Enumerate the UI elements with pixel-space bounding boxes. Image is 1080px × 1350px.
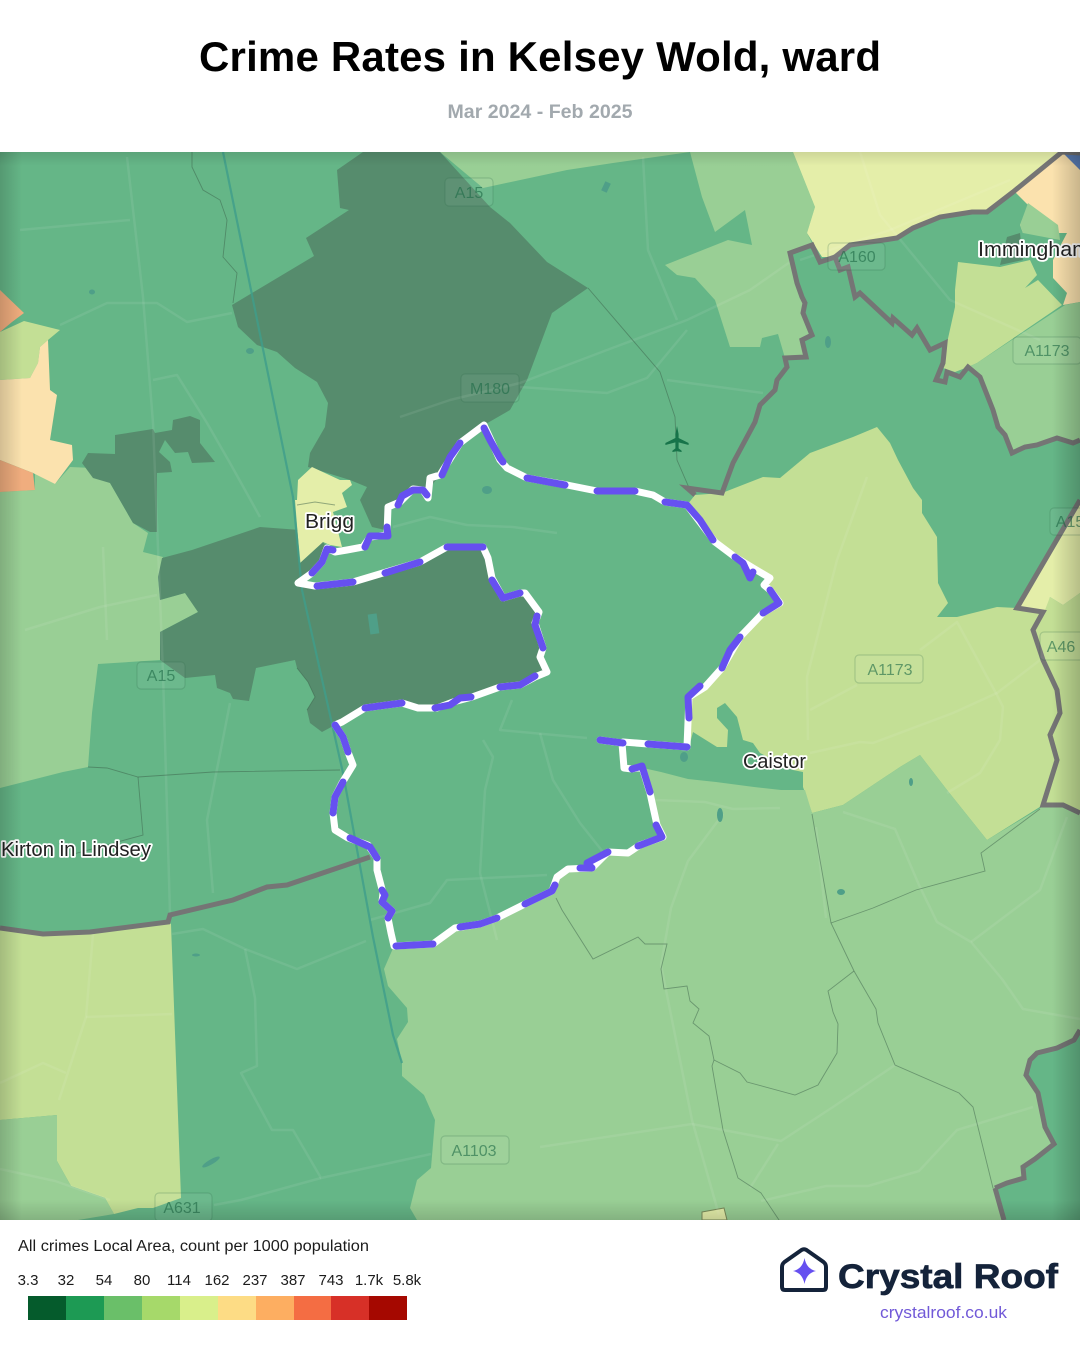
place labels: Kirton in Lindsey [1,839,151,861]
legend scale values: 80 [134,1272,150,1289]
place labels: Caistor [743,751,806,773]
website link: crystalroof.co.uk [880,1303,1008,1322]
road shields: A1173 [1024,343,1070,360]
area: west orange south [0,460,35,492]
road shields: A46 [1047,639,1075,656]
legend scale values: 237 [242,1272,268,1289]
area: yellow-green Immingham south [943,260,1062,372]
title: Crime Rates in Kelsey Wold, ward [199,33,881,80]
map edge vignette [0,152,1080,1220]
road shields: A631 [163,1200,201,1217]
area: Brigg pale [295,467,352,563]
road shields [137,178,1080,1221]
place labels [1,239,1080,861]
area: small yellow south town [702,1208,727,1220]
road shields: A15 [455,185,483,202]
area: far east yellow-green strip [1033,593,1080,813]
road shields: A15 [147,668,175,685]
ward boundary: purple dashes [312,428,779,946]
area: dark west fragment [82,416,215,532]
legend scale values: 32 [58,1272,74,1289]
area: west orange north [0,290,24,332]
logo: Crystal Roof [782,1249,1059,1322]
roads [0,152,1080,1215]
place labels: Brigg [305,511,354,533]
railway line [223,152,402,1063]
legend scale values: 3.3 [18,1272,38,1289]
legend colour bar [28,1296,407,1320]
area: central-east yellow-green [687,427,1060,840]
road shields: A1103 [451,1143,497,1160]
wordmark: Crystal Roof [838,1258,1059,1296]
area: Immingham light green [1020,203,1060,240]
legend scale values: 5.8k [393,1272,422,1289]
legend scale values: 114 [167,1272,191,1289]
choropleth map [0,152,1080,1223]
area: southern light green [384,755,1080,1220]
area: A1173 light green east [968,302,1080,453]
legend scale values [18,1272,422,1289]
area: west light green [0,467,198,788]
road shields: A160 [838,249,876,266]
area: north-east light green [665,152,815,358]
area: west peach [0,340,73,484]
area: far east pale [1021,505,1080,610]
area: south-west yellow-green [0,922,181,1214]
thin boundaries [70,152,1040,1223]
ward boundary: white base line [298,425,780,946]
area: estuary water [1064,154,1080,170]
area: west yellow-green [0,321,60,380]
legend scale values: 743 [318,1272,344,1289]
area: peach north-east corner [1015,152,1080,305]
road shields: A1173 [867,662,913,679]
subtitle: date range: Mar 2024 - Feb 2025 [448,102,633,123]
area: pale yellow north-east [793,152,1062,257]
area: Immingham dark [1000,233,1023,265]
water bodies [89,181,913,1169]
legend scale values: 387 [280,1272,306,1289]
county boundaries [0,152,1080,1220]
area: dark enclosed by ward [158,527,547,732]
legend [18,1238,422,1320]
area: northern light green [440,152,690,188]
road shields: M180 [470,381,510,398]
icon: airport plane [665,426,689,452]
area: dark north around Broughton [232,152,588,530]
legend scale values: 54 [96,1272,112,1289]
icon: house with star [782,1249,826,1290]
place labels: Immingham [978,239,1080,261]
area: south-west light green [0,1115,114,1220]
legend scale values: 162 [204,1272,230,1289]
legend heading: All crimes Local Area, count per 1000 population [18,1238,369,1255]
legend scale values: 1.7k [355,1272,384,1289]
